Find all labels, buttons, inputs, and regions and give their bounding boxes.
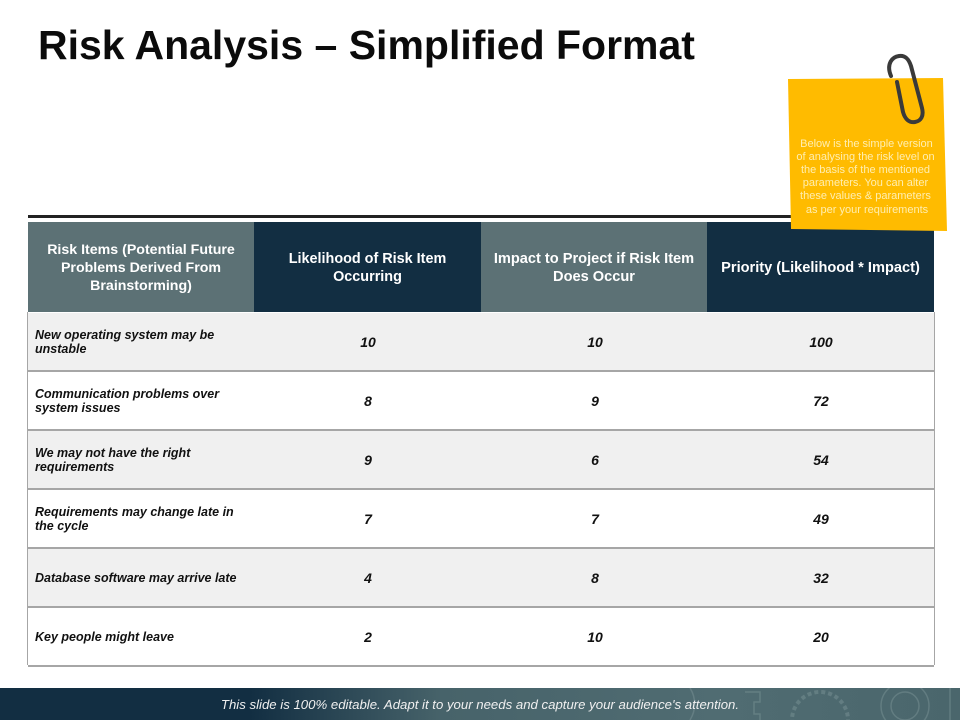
row 6 — [28, 608, 934, 667]
row 4: Requirements may change late in the cycle — [35, 504, 234, 532]
row 5: Database software may arrive late — [35, 570, 236, 584]
row 3: We may not have the right requirements — [35, 446, 190, 474]
row 6: 2 — [364, 629, 372, 645]
row 5: 8 — [591, 570, 599, 586]
note text: these values & parameters — [800, 190, 931, 202]
header: impact — [481, 222, 707, 312]
row 3: 6 — [591, 452, 599, 468]
title: Risk Analysis – Simplified Format — [38, 22, 695, 68]
row 4: 49 — [813, 511, 829, 527]
row 5: 32 — [813, 570, 829, 586]
row 5: 4 — [364, 570, 372, 586]
header: priority — [707, 222, 934, 312]
header: risk items: Risk Items (Potential Future Problems Derived From Brainstorming) — [47, 242, 235, 294]
table frame — [27, 312, 935, 665]
header: priority: Priority (Likelihood * Impact) — [721, 260, 920, 276]
row 6: Key people might leave — [35, 630, 174, 644]
footer band — [0, 688, 960, 720]
row 1: 10 — [360, 334, 376, 350]
icon: paperclip — [889, 56, 923, 122]
footer gear pattern — [690, 688, 951, 720]
row 6: 20 — [813, 629, 829, 645]
row 2 — [28, 372, 934, 431]
row 5 — [28, 549, 934, 608]
header: impact: Impact to Project if Risk Item Does Occur — [494, 251, 694, 285]
row 4: 7 — [364, 511, 372, 527]
row 1 — [28, 313, 934, 372]
row 1: New operating system may be unstable — [35, 328, 214, 356]
row 3 — [28, 431, 934, 490]
row 4: 7 — [591, 511, 599, 527]
row 1: 10 — [587, 334, 603, 350]
note text: as per your requirements — [806, 204, 929, 216]
row 2: Communication problems over system issues — [35, 386, 219, 414]
sticky note — [788, 54, 947, 231]
table top rule — [28, 215, 828, 218]
row 3: 54 — [813, 452, 829, 468]
note text: the basis of the mentioned — [801, 164, 930, 176]
row 3: 9 — [364, 452, 372, 468]
footer text: This slide is 100% editable. Adapt it to your needs and capture your audience's attention. — [221, 697, 739, 712]
row 2: 9 — [591, 393, 599, 409]
row 6: 10 — [587, 629, 603, 645]
row 4 — [28, 490, 934, 549]
note text: parameters. You can alter — [803, 177, 928, 189]
note text: Below is the simple version — [800, 138, 933, 150]
header: likelihood — [254, 222, 481, 312]
note text: of analysing the risk level on — [796, 151, 935, 163]
header: risk items — [28, 222, 254, 312]
row 1: 100 — [809, 334, 833, 350]
row 2: 8 — [364, 393, 372, 409]
header: likelihood: Likelihood of Risk Item Occurring — [289, 251, 446, 285]
row 2: 72 — [813, 393, 829, 409]
